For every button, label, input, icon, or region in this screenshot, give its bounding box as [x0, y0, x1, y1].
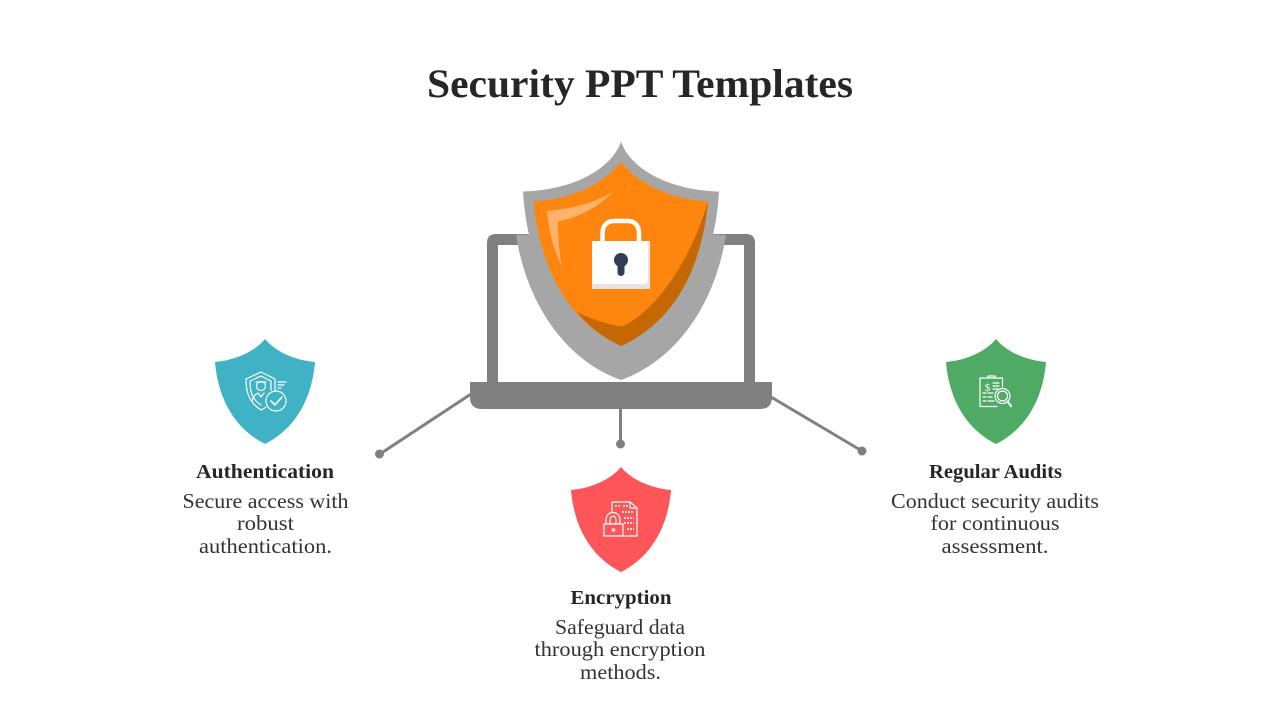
- green shield: [946, 339, 1046, 444]
- panel: authentication: [182, 339, 349, 558]
- title: Security PPT Templates: [427, 61, 853, 106]
- connector: left: [375, 394, 471, 458]
- description: authentication.: [199, 534, 332, 558]
- panel: encryption: [534, 467, 706, 684]
- connector: center: [616, 409, 625, 448]
- connector: right: [771, 397, 866, 456]
- description: Secure access with: [182, 489, 349, 513]
- description: assessment.: [942, 534, 1048, 558]
- dollar sign: $: [985, 382, 991, 394]
- orange shield: [534, 162, 708, 346]
- shield highlight: [547, 192, 613, 267]
- description: Conduct security audits: [891, 489, 1099, 513]
- laptop base: [470, 382, 772, 409]
- main shield: [516, 142, 726, 380]
- heading: Authentication: [196, 461, 335, 483]
- laptop screen frame: [487, 234, 755, 382]
- description: [891, 489, 1099, 558]
- orange shield shadow: [576, 202, 708, 346]
- panel: regular audits: [891, 339, 1099, 558]
- icon: audit clipboard with magnifier: [980, 376, 1011, 406]
- description: methods.: [580, 660, 661, 684]
- description: through encryption: [534, 637, 706, 661]
- icon: person shield with check: [246, 372, 286, 411]
- description: [534, 615, 706, 684]
- heading: Encryption: [570, 587, 672, 609]
- description: [182, 489, 349, 558]
- description: for continuous: [930, 511, 1060, 535]
- description: robust: [237, 511, 294, 535]
- description: Safeguard data: [555, 615, 686, 639]
- icon: encrypted file with lock: [604, 502, 637, 536]
- blue shield: [215, 339, 315, 444]
- outer gray shield: [516, 142, 726, 380]
- laptop: [470, 234, 772, 409]
- icon: padlock: [592, 221, 650, 289]
- red shield: [571, 467, 671, 572]
- heading: Regular Audits: [929, 461, 1062, 483]
